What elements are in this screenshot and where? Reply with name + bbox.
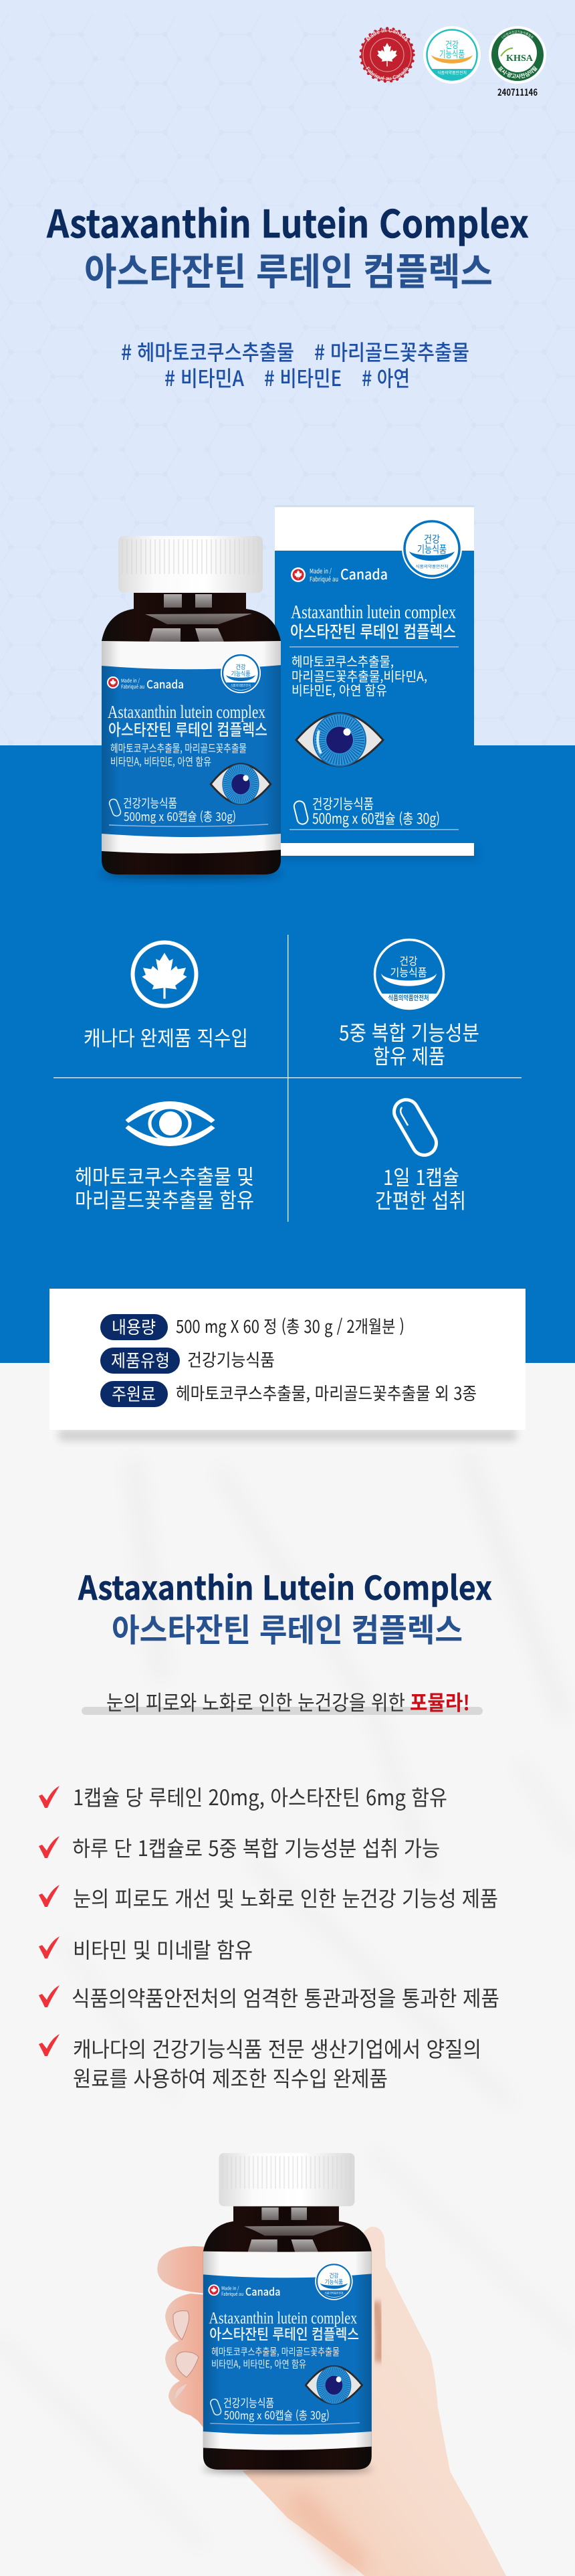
label health badge xyxy=(315,2263,353,2300)
row: product type xyxy=(100,1347,275,1374)
icon: box eye xyxy=(296,713,383,766)
box product name: Astaxanthin lutein complex xyxy=(291,602,456,623)
box dosage: 500mg x 60캡슐 (총 30g) xyxy=(312,808,440,828)
label Canada origin: Canada xyxy=(245,2284,281,2299)
icon: made in Canada red seal: Made in Canada xyxy=(366,28,408,41)
label health badge: 식품의약품안전처 xyxy=(231,683,251,688)
label Canada origin xyxy=(107,675,184,692)
row: product type: 제품유형 xyxy=(111,1348,170,1372)
product box xyxy=(275,505,477,859)
box Canada origin: Fabriqué au xyxy=(310,574,338,583)
feature grid xyxy=(53,935,522,1222)
label product name: Astaxanthin lutein complex xyxy=(108,702,265,722)
label ingredients xyxy=(110,739,247,769)
bottle cap xyxy=(118,536,263,593)
feature: one capsule a day xyxy=(375,1095,466,1214)
title: Astaxanthin Lutein Complex xyxy=(46,194,529,249)
box Canada origin: Canada xyxy=(340,564,388,584)
bottle cap xyxy=(219,2153,354,2206)
feature: one capsule a day: 1일 1캡슐 xyxy=(383,1161,459,1191)
label product name xyxy=(209,2308,359,2344)
bottle label xyxy=(102,641,281,854)
item 5: 식품의약품안전처의 엄격한 통관과정을 통과한 제품 xyxy=(72,1982,499,2013)
icon: health food oval: 건강 xyxy=(400,952,418,968)
label health badge: 기능식품 xyxy=(231,669,250,678)
feature: five complex ingredients: 5중 복합 기능성분 xyxy=(339,1016,479,1046)
feature: made in Canada xyxy=(84,942,248,1052)
hashtags: # 헤마토코쿠스추출물 xyxy=(121,336,294,367)
title: 아스타잔틴 루테인 컴플렉스 xyxy=(84,242,493,296)
icon: health food oval: 식품의약품안전처 xyxy=(388,992,429,1002)
icon: box capsule xyxy=(293,800,309,825)
feature: five complex ingredients xyxy=(339,939,479,1070)
icon: maple leaf xyxy=(132,942,197,1006)
label dosage: 건강기능식품 xyxy=(223,2394,274,2411)
label Canada origin: Fabriqué au xyxy=(121,683,144,691)
label Canada origin: Made in / xyxy=(221,2286,239,2292)
item 6 xyxy=(39,2033,481,2093)
label health badge: 기능식품 xyxy=(325,2278,343,2286)
label ingredients: 헤마토코쿠스추출물, 마리골드꽃추출물 xyxy=(110,739,247,755)
row: main ingredients: 헤마토코쿠스추출물, 마리골드꽃추출물 외 3종 xyxy=(176,1380,477,1405)
item 4: 비타민 및 미네랄 함유 xyxy=(73,1934,253,1964)
row: main ingredients: 주원료 xyxy=(112,1381,156,1406)
info panel xyxy=(49,1289,526,1441)
box health food badge: 기능식품 xyxy=(417,542,447,556)
second title: 아스타잔틴 루테인 컴플렉스 xyxy=(112,1604,463,1651)
row: contents xyxy=(100,1313,405,1340)
hand holding bottle xyxy=(157,2227,506,2576)
label Canada origin: Fabriqué au xyxy=(221,2291,243,2298)
label dosage: 500mg x 60캡슐 (총 30g) xyxy=(224,2406,330,2423)
label Canada origin: Made in / xyxy=(121,677,140,684)
feature: one capsule a day: 간편한 섭취 xyxy=(375,1184,466,1214)
index finger xyxy=(157,2246,207,2294)
label product name: 아스타잔틴 루테인 컴플렉스 xyxy=(108,717,267,740)
certification number: 240711146 xyxy=(497,86,538,99)
hand palm and thumb xyxy=(243,2227,506,2576)
label ingredients: 비타민A, 비타민E, 아연 함유 xyxy=(211,2357,306,2371)
box health food badge: 식품의약품안전처 xyxy=(416,563,448,569)
box ingredients: 비타민E, 아연 함유 xyxy=(292,680,387,699)
icon: label capsule xyxy=(108,798,122,817)
label health badge: 건강 xyxy=(235,662,246,671)
background: marble xyxy=(0,1363,575,2576)
label Canada origin: Canada xyxy=(146,675,184,692)
benefit checklist xyxy=(39,1781,499,2093)
box ingredients: 마리골드꽃추출물,비타민A, xyxy=(292,666,427,685)
icon: KHSA review mark xyxy=(489,26,546,84)
feature: extracts: 마리골드꽃추출물 함유 xyxy=(75,1184,254,1214)
icon: health functional food mark: 건강 xyxy=(445,38,459,52)
feature: extracts: 헤마토코쿠스추출물 및 xyxy=(75,1160,254,1190)
background: blue band xyxy=(0,745,575,1363)
icon: label capsule xyxy=(209,2398,222,2416)
label product name: Astaxanthin lutein complex xyxy=(209,2308,357,2327)
icon: eye outline xyxy=(126,1102,214,1145)
icon: label eye xyxy=(306,2366,362,2404)
icon: made in Canada red seal: Fabriqué au Canada xyxy=(366,67,409,80)
item 6: 원료를 사용하여 제조한 직수입 완제품 xyxy=(73,2062,388,2093)
label dosage xyxy=(123,794,236,825)
icon: KHSA review mark: 표시·광고사전심의필 xyxy=(497,66,538,79)
label ingredients xyxy=(211,2344,340,2371)
second title xyxy=(78,1562,492,1651)
hashtags: # 비타민A xyxy=(164,362,244,393)
label product name xyxy=(108,702,267,740)
subtitle with highlight bar: 눈의 피로와 노화로 인한 눈건강을 위한 xyxy=(106,1686,405,1716)
label Canada origin xyxy=(208,2284,281,2299)
box ingredients: 헤마토코쿠스추출물, xyxy=(292,651,394,670)
row: product type: 건강기능식품 xyxy=(187,1347,275,1372)
feature: five complex ingredients: 함유 제품 xyxy=(373,1040,445,1070)
held product bottle xyxy=(203,2153,372,2473)
middle finger xyxy=(165,2294,207,2347)
title xyxy=(46,194,529,296)
box health food badge: 건강 xyxy=(424,532,440,546)
row: main ingredients xyxy=(100,1380,477,1407)
hashtags: # 마리골드꽃추출물 xyxy=(314,336,469,367)
background: light blue hero xyxy=(0,0,575,746)
icon: made in Canada red seal xyxy=(359,27,415,83)
background: hexagon molecule pattern xyxy=(0,13,575,746)
icon: label eye xyxy=(211,764,271,804)
ring finger xyxy=(165,2340,207,2385)
label health badge xyxy=(221,653,261,693)
palm shading xyxy=(376,2302,380,2362)
icon: capsule xyxy=(390,1095,441,1160)
hashtags: # 비타민E xyxy=(264,362,342,393)
subtitle with highlight bar: 포뮬라! xyxy=(410,1686,470,1716)
box product name: 아스타잔틴 루테인 컴플렉스 xyxy=(290,619,456,643)
box Canada origin xyxy=(291,564,388,584)
bottle glass xyxy=(102,593,281,875)
hashtags xyxy=(121,336,469,393)
box ingredients xyxy=(292,651,427,699)
icon: health food oval xyxy=(374,939,444,1010)
icon: KHSA review mark: KHSA xyxy=(506,54,534,64)
label health badge: 식품의약품안전처 xyxy=(324,2290,344,2295)
row: contents: 500 mg X 60 정 (총 30 g / 2개월분 ) xyxy=(176,1313,405,1338)
box Canada origin: Made in / xyxy=(310,566,332,575)
icon: health functional food mark: 식품의약품안전처 xyxy=(437,70,467,76)
hashtags: # 아연 xyxy=(362,362,410,393)
label ingredients: 비타민A, 비타민E, 아연 함유 xyxy=(110,753,211,769)
feature: extracts xyxy=(75,1102,254,1214)
bottle glass xyxy=(203,2206,372,2470)
label dosage: 건강기능식품 xyxy=(123,794,177,812)
label dosage xyxy=(223,2394,330,2423)
feature: made in Canada: 캐나다 완제품 직수입 xyxy=(84,1022,248,1052)
box health food badge xyxy=(402,519,462,579)
icon: health functional food mark: 기능식품 xyxy=(439,48,465,61)
icon: health functional food mark xyxy=(423,26,481,84)
label ingredients: 헤마토코쿠스추출물, 마리골드꽃추출물 xyxy=(211,2344,340,2359)
label dosage: 500mg x 60캡슐 (총 30g) xyxy=(124,808,236,825)
box dosage: 건강기능식품 xyxy=(312,794,374,814)
pinky finger xyxy=(168,2380,207,2427)
box dosage xyxy=(312,794,440,828)
icon: health food oval: 기능식품 xyxy=(390,963,427,980)
label product name: 아스타잔틴 루테인 컴플렉스 xyxy=(209,2323,359,2344)
box product name xyxy=(290,602,456,643)
second title: Astaxanthin Lutein Complex xyxy=(78,1562,492,1610)
item 6: 캐나다의 건강기능식품 전문 생산기업에서 양질의 xyxy=(73,2033,481,2063)
label health badge: 건강 xyxy=(329,2272,339,2280)
bottle label xyxy=(203,2251,372,2450)
row: contents: 내용량 xyxy=(112,1314,156,1339)
icon: KHSA review mark: (사)한국건강기능식품협회 xyxy=(501,30,534,39)
glass highlights xyxy=(244,2207,344,2252)
certification badges xyxy=(359,26,546,99)
item 3: 눈의 피로도 개선 및 노화로 인한 눈건강 기능성 제품 xyxy=(73,1882,498,1913)
glass highlights xyxy=(145,594,252,642)
product bottle xyxy=(101,536,281,878)
item 1: 1캡슐 당 루테인 20mg, 아스타잔틴 6mg 함유 xyxy=(73,1781,447,1812)
item 2: 하루 단 1캡슐로 5중 복합 기능성분 섭취 가능 xyxy=(72,1832,440,1863)
